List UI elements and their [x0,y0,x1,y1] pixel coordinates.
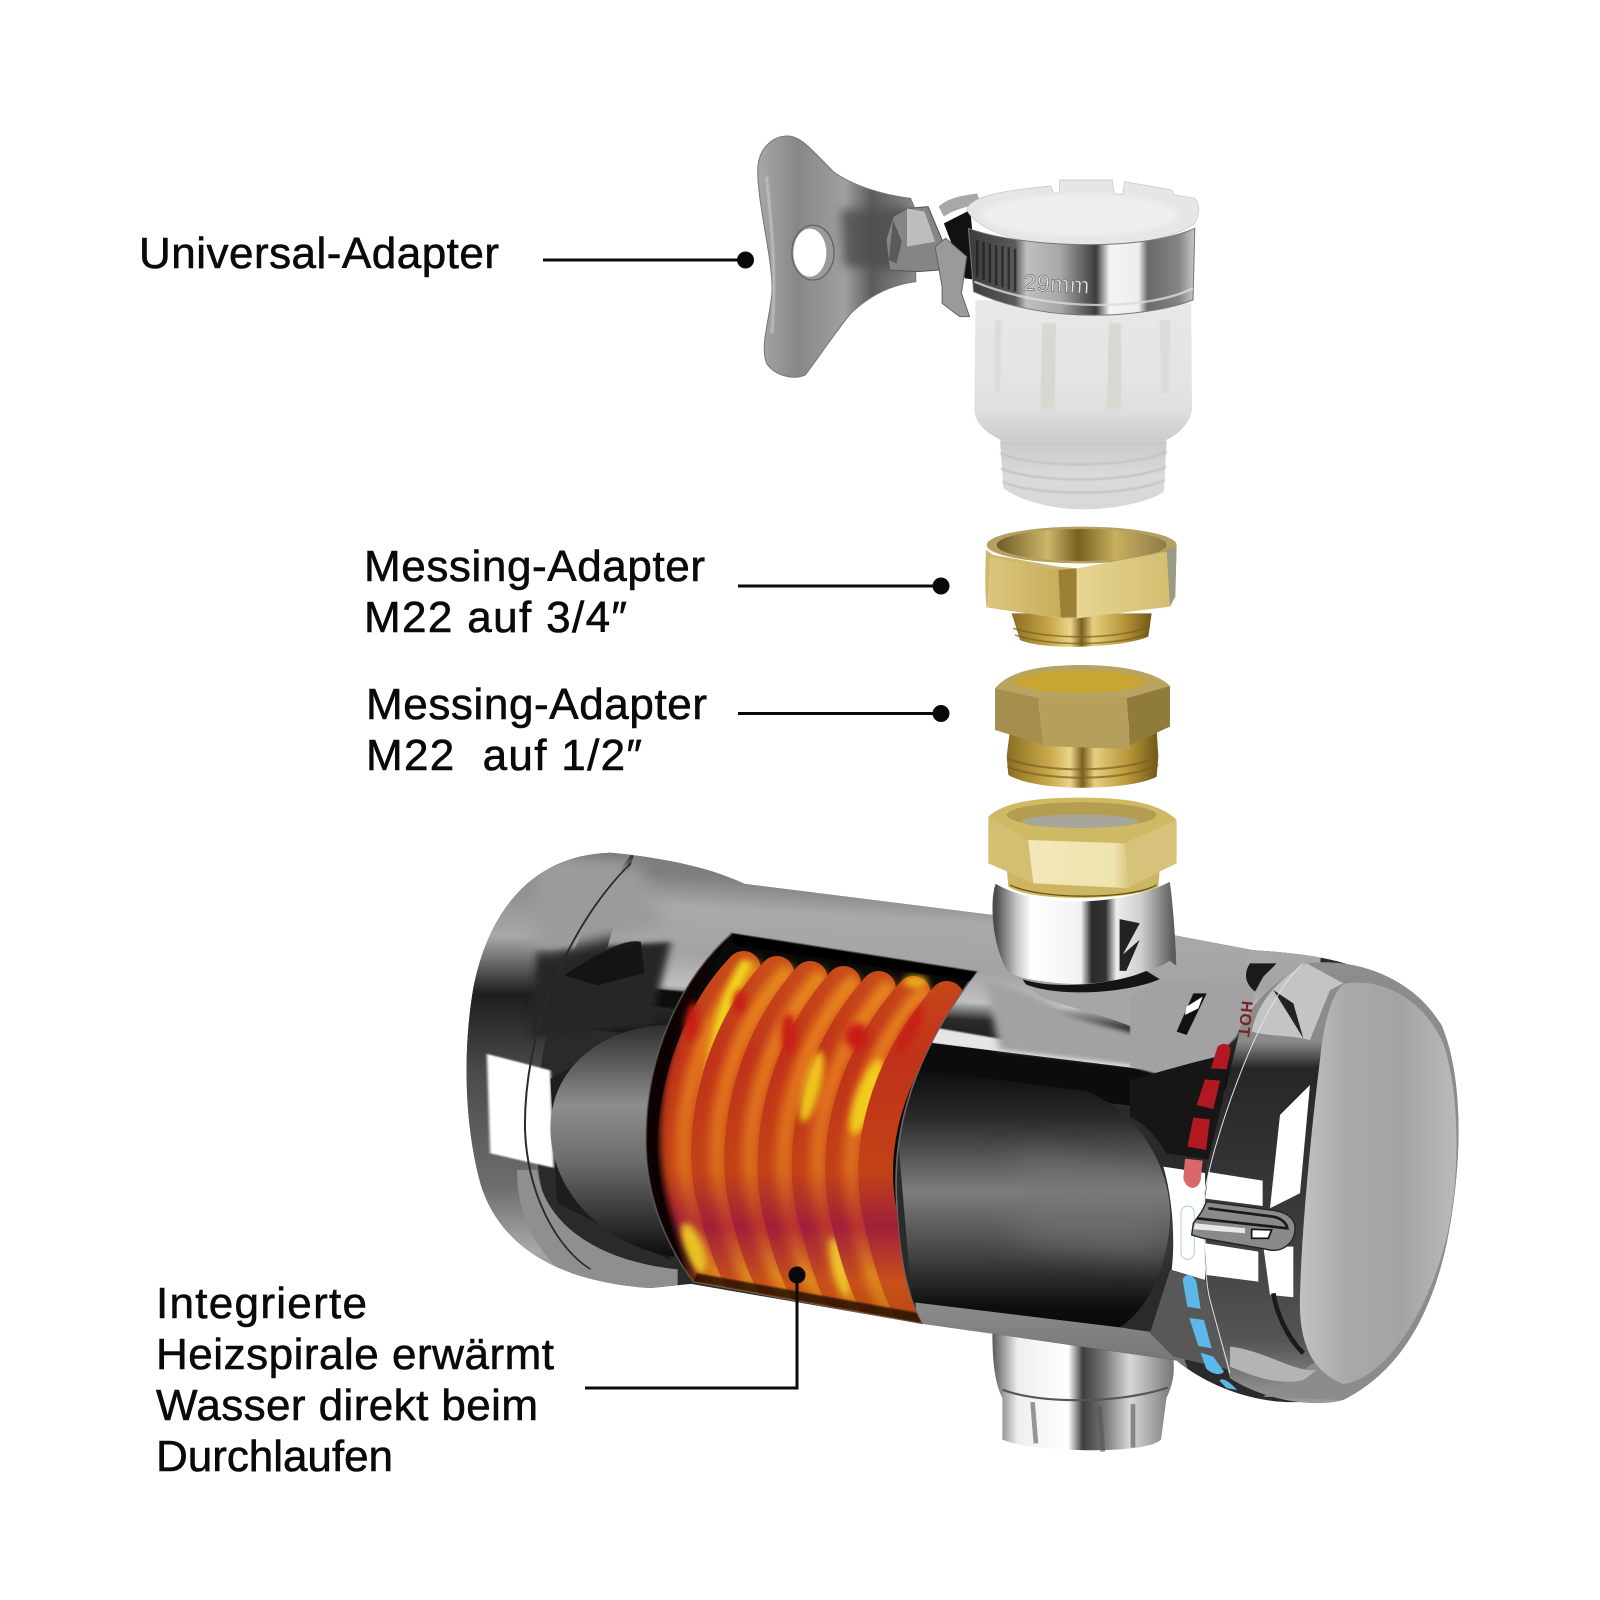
clip lever [935,238,969,317]
brass adapter 3/4 [985,527,1177,647]
HOT label: HOT [1234,1000,1255,1038]
coil turn 4 [775,983,852,1312]
coil turn 7 [876,998,947,1327]
label: Messing-Adapter M22 auf 3/4: Messing-Adapter [364,542,705,591]
label: integrated heating coil [156,1266,806,1481]
cold scale marks [1183,1275,1237,1390]
coil turn 1 [675,962,752,1293]
hot scale marks [1183,1044,1231,1188]
label: Messing-Adapter M22 auf 1/2: M22 auf 1/2″ [366,731,642,780]
label: integrated heating coil: Heizspirale erwärmt [156,1330,554,1379]
label: Universal-Adapter [139,229,754,278]
cutaway with heating coil [646,933,977,1327]
thread [1007,730,1158,788]
right heating element [892,1066,1170,1327]
plastic body [974,300,1192,509]
label: Messing-Adapter M22 auf 1/2: Messing-Adapter [366,680,707,729]
label: Messing-Adapter M22 auf 3/4: M22 auf 3/4″ [364,593,627,642]
illustration: brass adapters [985,527,1177,898]
main chrome body [466,852,1348,1402]
left end cap [466,852,640,1288]
leader line [585,1266,806,1388]
upper chrome reflection [600,855,1320,1090]
label: Messing-Adapter M22 auf 3/4 [364,542,950,642]
band size marking: 29mm [1023,269,1090,298]
label: Messing-Adapter M22 auf 1/2 [366,680,950,780]
chrome ring [1204,962,1459,1403]
coil turn 3 [742,978,819,1307]
label: integrated heating coil: Integrierte [156,1279,367,1328]
thread [1012,613,1152,647]
wing nut [758,136,916,377]
white reflection left [487,1054,554,1168]
brass nut on inlet [988,798,1177,898]
illustration: heater body [463,842,1455,1452]
inlet chrome neck [986,882,1240,1068]
coil turn 2 [709,973,785,1300]
plastic collar [967,180,1199,246]
cap face [1300,983,1457,1384]
leader line [543,252,754,268]
wing nut hole [792,225,834,280]
coil turn 6 [842,976,927,1322]
neutral scale mark [1181,1206,1194,1259]
metal clamp band [968,228,1195,315]
coil turn 5 [795,988,887,1317]
leader line [738,705,950,722]
lower chrome [915,1302,1188,1369]
bottom outlet valve [992,1334,1174,1452]
plastic thread [1000,441,1167,509]
label: integrated heating coil: Wasser direkt beim [156,1381,538,1430]
left heating element [550,1025,674,1257]
brass adapter 1/2 [995,665,1170,788]
illustration: temperature dial and cap [1130,962,1459,1403]
temperature lever [1192,1202,1295,1250]
leader line [738,578,950,594]
chrome shoulder [1130,980,1255,1370]
label: Universal-Adapter: Universal-Adapter [139,229,499,278]
clamp bolt [886,193,981,280]
illustration: universal adapter [758,136,1199,509]
label: integrated heating coil: Durchlaufen [156,1432,393,1481]
